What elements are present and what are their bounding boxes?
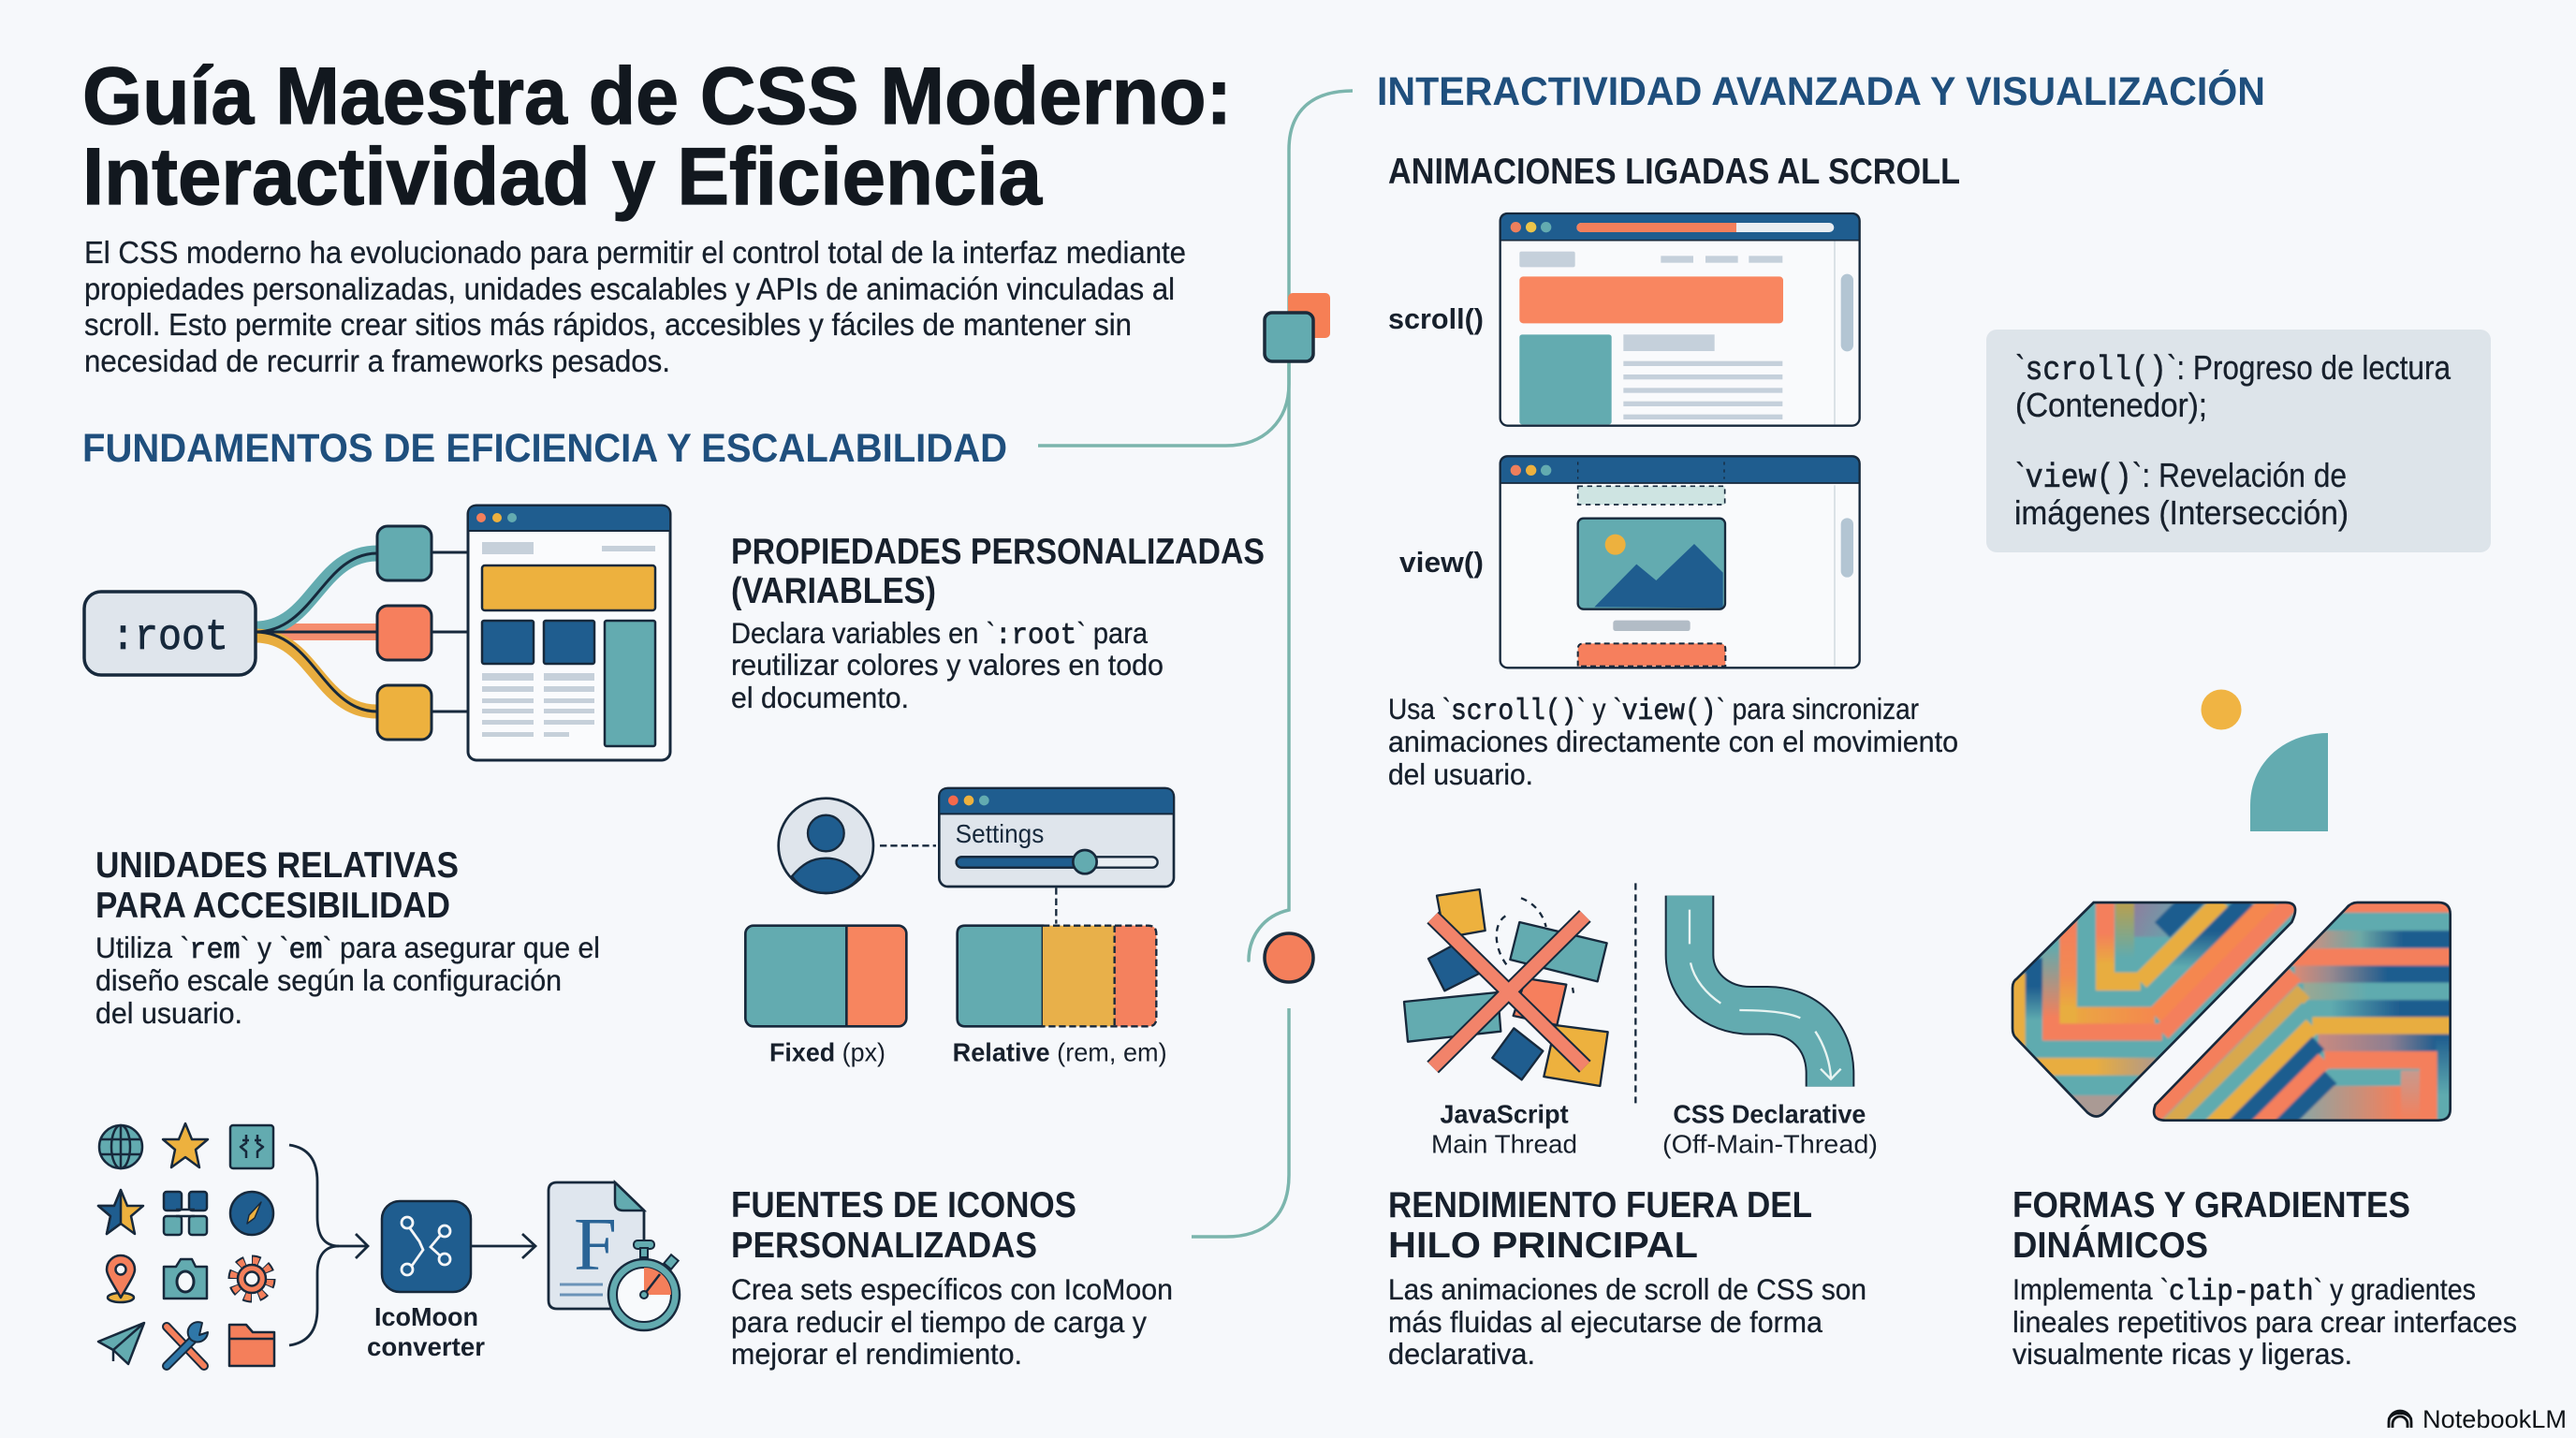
label: javascript [1431, 1099, 1577, 1158]
notebooklm badge: NotebookLM [2422, 1405, 2567, 1433]
root box [84, 592, 256, 675]
text: rendimiento: HILO PRINCIPAL [1388, 1225, 1698, 1266]
text: rendimiento: declarativa. [1388, 1337, 1535, 1371]
icon: chip [230, 1125, 273, 1168]
icomoon converter: IcoMoon [374, 1302, 478, 1331]
text: unidades relativas: del usuario. [95, 996, 242, 1030]
callout: scroll and view: `view()`: Revelación de [2015, 456, 2347, 497]
text: unidades relativas: Utiliza `rem` y `em` para asegurar que el [95, 931, 600, 967]
text: unidades relativas [95, 845, 600, 1030]
label: css declarative [1662, 1099, 1878, 1158]
text: fuentes de iconos [731, 1185, 1173, 1371]
subheading: animaciones: ANIMACIONES LIGADAS AL SCROLL [1388, 152, 1960, 192]
icon: paper plane [98, 1323, 144, 1364]
timeline node: circle [1265, 933, 1313, 982]
label: fixed: Fixed (px) [769, 1037, 886, 1066]
relative layout box [958, 926, 1156, 1026]
text: propiedades personalizadas: reutilizar colores y valores en todo [731, 648, 1164, 682]
stopwatch [608, 1240, 680, 1330]
intro text [84, 235, 1186, 378]
icon: camera [164, 1259, 207, 1299]
browser window [468, 506, 670, 760]
label: view(): view() [1399, 546, 1484, 579]
text: rendimiento: Las animaciones de scroll de CSS son [1388, 1272, 1866, 1306]
text: fuentes de iconos: mejorar el rendimiento. [731, 1337, 1022, 1371]
section heading: fundamentos: FUNDAMENTOS DE EFICIENCIA Y ESCALABILIDAD [82, 426, 1007, 471]
label: css declarative: (Off-Main-Thread) [1662, 1129, 1878, 1158]
text: unidades relativas: diseño escale según la configuración [95, 963, 562, 997]
diagram: js vs css [1404, 883, 1878, 1158]
font file with stopwatch [549, 1182, 680, 1330]
connector bands [256, 552, 468, 712]
label: javascript: JavaScript [1440, 1099, 1569, 1128]
text: propiedades personalizadas: (VARIABLES) [731, 571, 936, 611]
label: scroll(): scroll() [1388, 302, 1484, 335]
text: usa scroll y view: Usa `scroll()` y `view()` para sincronizar [1388, 692, 1919, 728]
timeline connector [1038, 91, 1353, 1237]
text: rendimiento [1388, 1185, 1866, 1371]
intro text: scroll. Esto permite crear sitios más rápidos, accesibles y fáciles de mantener sin [84, 307, 1132, 342]
text: usa scroll y view [1388, 692, 1958, 791]
red cross [1433, 916, 1585, 1067]
diagram: clip-path gradient shapes [2011, 901, 2452, 1122]
scroll browser [1500, 213, 1860, 426]
text: propiedades personalizadas: PROPIEDADES PERSONALIZADAS [731, 532, 1265, 572]
title: Interactividad y Eficiencia [82, 132, 1043, 222]
right shape [2153, 901, 2452, 1122]
text: rendimiento: RENDIMIENTO FUERA DEL [1388, 1185, 1812, 1225]
icomoon converter: converter [367, 1332, 485, 1361]
icon: half star [98, 1190, 143, 1234]
text: formas y gradientes: lineales repetitivos para crear interfaces [2012, 1305, 2517, 1339]
chaotic javascript shapes [1404, 889, 1608, 1086]
text: usa scroll y view: animaciones directamente con el movimiento [1388, 725, 1958, 758]
fixed layout box [745, 926, 906, 1026]
icon: star [163, 1123, 208, 1167]
diagram: relative units [745, 788, 1174, 1066]
browser mockups [1500, 213, 1860, 668]
icon: globe [99, 1125, 142, 1168]
title [82, 51, 1232, 222]
section heading: interactividad: INTERACTIVIDAD AVANZADA Y VISUALIZACIÓN [1377, 68, 2265, 114]
icon: map pin [107, 1255, 135, 1302]
decoration: yellow dot [2202, 689, 2241, 730]
text: propiedades personalizadas: Declara variables en `:root` para [731, 616, 1148, 653]
icon: tools [167, 1322, 208, 1366]
callout: scroll and view [1986, 330, 2491, 552]
label: css declarative: CSS Declarative [1673, 1099, 1866, 1128]
text: formas y gradientes: DINÁMICOS [2012, 1225, 2208, 1266]
text: unidades relativas: PARA ACCESIBILIDAD [95, 886, 450, 926]
label: javascript: Main Thread [1431, 1129, 1577, 1158]
variable chips [377, 526, 432, 740]
root box: :root [111, 613, 228, 662]
css road [1690, 896, 1841, 1087]
diagram: root variables [84, 506, 670, 760]
font file with stopwatch: F [574, 1204, 617, 1286]
icon: compass [230, 1192, 273, 1235]
text: fuentes de iconos: Crea sets específicos con IcoMoon [731, 1272, 1173, 1306]
icon: folder [229, 1325, 274, 1366]
text: propiedades personalizadas [731, 532, 1265, 714]
callout: scroll and view: (Contenedor); [2015, 386, 2207, 424]
title: Guía Maestra de CSS Moderno: [82, 51, 1232, 141]
text: unidades relativas: UNIDADES RELATIVAS [95, 845, 459, 886]
decoration: teal quarter shape [2250, 733, 2328, 831]
text: usa scroll y view: del usuario. [1388, 757, 1533, 791]
text: formas y gradientes: Implementa `clip-path` y gradientes [2012, 1272, 2476, 1309]
intro text: propiedades personalizadas, unidades escalables y APIs de animación vinculadas al [84, 271, 1175, 306]
icon: grid [164, 1192, 207, 1235]
arrow to font file [471, 1234, 535, 1258]
callout: scroll and view: `scroll()`: Progreso de lectura [2015, 348, 2452, 389]
divider [1632, 883, 1639, 1103]
text: propiedades personalizadas: el documento. [731, 681, 909, 714]
settings window [939, 788, 1174, 887]
icon grid [98, 1123, 274, 1366]
icomoon converter [367, 1201, 485, 1361]
intro text: El CSS moderno ha evolucionado para permitir el control total de la interfaz mediante [84, 235, 1186, 270]
text: fuentes de iconos: FUENTES DE ICONOS [731, 1185, 1076, 1225]
settings window: Settings [956, 819, 1044, 848]
callout: scroll and view: imágenes (Intersección) [2014, 493, 2349, 532]
view browser [1500, 456, 1860, 668]
label: relative: Relative (rem, em) [953, 1037, 1167, 1066]
text: formas y gradientes: FORMAS Y GRADIENTES [2012, 1185, 2410, 1225]
bracket arrow [289, 1145, 368, 1345]
icon: gear [234, 1261, 270, 1297]
icon: notebooklm [2389, 1411, 2411, 1428]
left shape [2011, 901, 2297, 1118]
text: rendimiento: más fluidas al ejecutarse de forma [1388, 1305, 1822, 1339]
text: fuentes de iconos: para reducir el tiempo de carga y [731, 1305, 1147, 1339]
text: formas y gradientes: visualmente ricas y ligeras. [2012, 1337, 2352, 1371]
intro text: necesidad de recurrir a frameworks pesados. [84, 344, 670, 378]
user avatar [779, 799, 873, 893]
timeline node: squares [1265, 293, 1330, 361]
text: fuentes de iconos: PERSONALIZADAS [731, 1225, 1037, 1266]
text: formas y gradientes [2012, 1185, 2517, 1371]
